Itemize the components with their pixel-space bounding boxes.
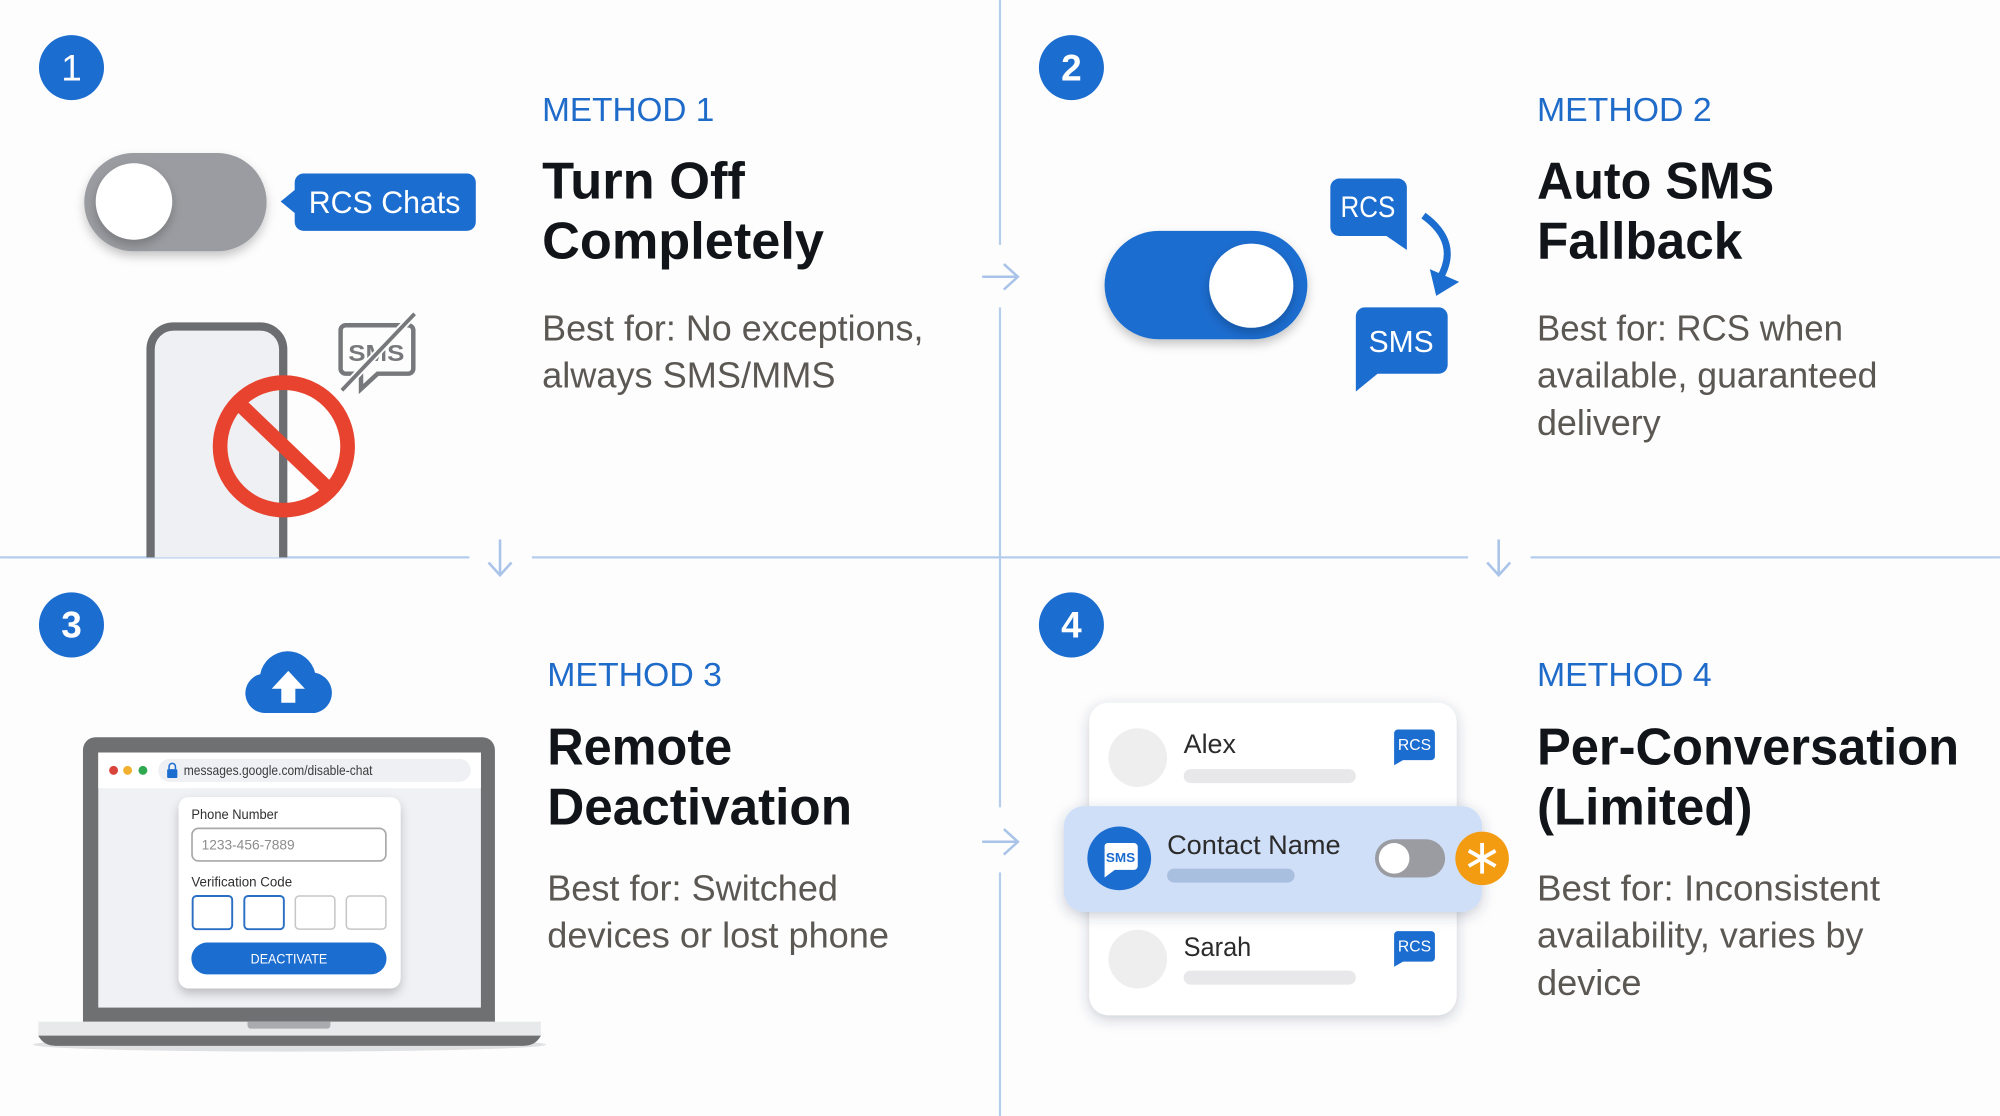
badge: number 4 [1039, 592, 1104, 657]
text: best for method 2 [1537, 309, 1877, 443]
browser toolbar: messages.google.com/disable-chat [184, 762, 373, 778]
arrow: method 3 to method 4 [982, 829, 1018, 855]
heading: Per-Conversation (Limited): (Limited) [1537, 779, 1753, 837]
heading: Turn Off Completely: Completely [542, 212, 824, 270]
icon: prohibited sign [220, 383, 348, 510]
row: Sarah: RCS [1398, 938, 1431, 955]
illustration: laptop [33, 737, 546, 1052]
row: Sarah: Sarah [1184, 932, 1251, 962]
text: best for method 4: Best for: Inconsistent [1537, 868, 1880, 908]
label bubble: RCS Chats: RCS Chats [309, 184, 460, 220]
form card: Verification Code [191, 874, 292, 889]
badge: number 2: 2 [1061, 47, 1082, 88]
panel: method 2 [1039, 35, 1877, 443]
text: best for method 2: Best for: RCS when [1537, 309, 1843, 349]
laptop lid [83, 737, 495, 1023]
bubble: SMS [1356, 307, 1448, 392]
row: Alex [1108, 728, 1435, 787]
badge: number 4: 4 [1061, 605, 1082, 646]
arrow: method 2 to method 4 [1487, 540, 1510, 575]
text: best for method 1: Best for: No exceptions, [542, 309, 923, 349]
bubble: RCS [1330, 179, 1407, 250]
text: method 3 label: METHOD 3 [547, 657, 722, 694]
form card: 1233-456-7889 [202, 836, 295, 852]
heading: Per-Conversation (Limited) [1537, 719, 1959, 837]
panel: method 4 [1039, 592, 1959, 1015]
panel: method 1 [39, 35, 923, 557]
row: highlighted contact: Contact Name [1167, 830, 1341, 860]
badge: number 2 [1039, 35, 1104, 100]
text: method 4 label: METHOD 4 [1537, 657, 1712, 694]
text: best for method 3: Best for: Switched [547, 868, 838, 908]
bubble: SMS: SMS [1369, 325, 1434, 359]
row: highlighted contact [1064, 806, 1482, 912]
text: best for method 2: delivery [1537, 403, 1661, 443]
heading: Auto SMS Fallback: Fallback [1537, 212, 1743, 270]
text: best for method 3: devices or lost phone [547, 916, 889, 956]
list card [1089, 703, 1457, 1015]
icon: cloud upload [245, 651, 332, 713]
heading: Remote Deactivation: Deactivation [547, 779, 852, 837]
illustration: conversation list [1064, 703, 1509, 1015]
arrow: method 1 to method 2 [982, 264, 1018, 290]
row: Alex: Alex [1184, 729, 1237, 759]
row: Alex: RCS [1398, 737, 1431, 754]
heading: Remote Deactivation [547, 719, 852, 837]
bubble: RCS: RCS [1341, 191, 1395, 224]
browser screen [98, 753, 481, 1008]
text: best for method 1: always SMS/MMS [542, 356, 835, 396]
laptop base [38, 1022, 541, 1046]
badge: number 3: 3 [61, 605, 82, 646]
text: best for method 3 [547, 868, 889, 956]
text: best for method 1 [542, 309, 923, 396]
arrow: RCS falls back to SMS [1423, 216, 1459, 296]
icon: blue toggle switched on [1105, 231, 1307, 339]
text: method 1 label: METHOD 1 [542, 92, 714, 129]
heading: Turn Off Completely: Turn Off [542, 152, 745, 210]
text: best for method 4 [1537, 868, 1880, 1003]
form card: DEACTIVATE [251, 952, 327, 967]
form card: Phone Number [191, 807, 279, 822]
heading: Per-Conversation (Limited): Per-Conversation [1537, 719, 1959, 777]
text: best for method 4: availability, varies by [1537, 916, 1864, 956]
label bubble: RCS Chats [281, 173, 476, 231]
panel: method 3 [33, 592, 889, 1052]
icon: phone [151, 327, 283, 557]
heading: Auto SMS Fallback: Auto SMS [1537, 152, 1774, 210]
icon: grey toggle switched off [84, 153, 267, 251]
row: highlighted contact: SMS [1106, 850, 1135, 865]
heading: Auto SMS Fallback [1537, 152, 1774, 270]
form card [179, 797, 401, 988]
icon: crossed out SMS bubble [341, 314, 415, 390]
text: method 2 label: METHOD 2 [1537, 92, 1712, 129]
badge: number 1: 1 [61, 47, 82, 88]
heading: Turn Off Completely [542, 152, 824, 270]
icon: orange asterisk [1455, 832, 1509, 885]
badge: number 3 [39, 592, 104, 657]
row: Sarah [1108, 930, 1435, 988]
icon: crossed out SMS bubble: SMS [348, 340, 404, 366]
laptop shadow [33, 1038, 546, 1052]
browser toolbar [98, 753, 481, 788]
arrow: method 1 to method 3 [489, 540, 512, 575]
heading: Remote Deactivation: Remote [547, 719, 732, 777]
text: best for method 2: available, guaranteed [1537, 356, 1877, 396]
text: best for method 4: device [1537, 963, 1642, 1003]
badge: number 1 [39, 35, 104, 100]
